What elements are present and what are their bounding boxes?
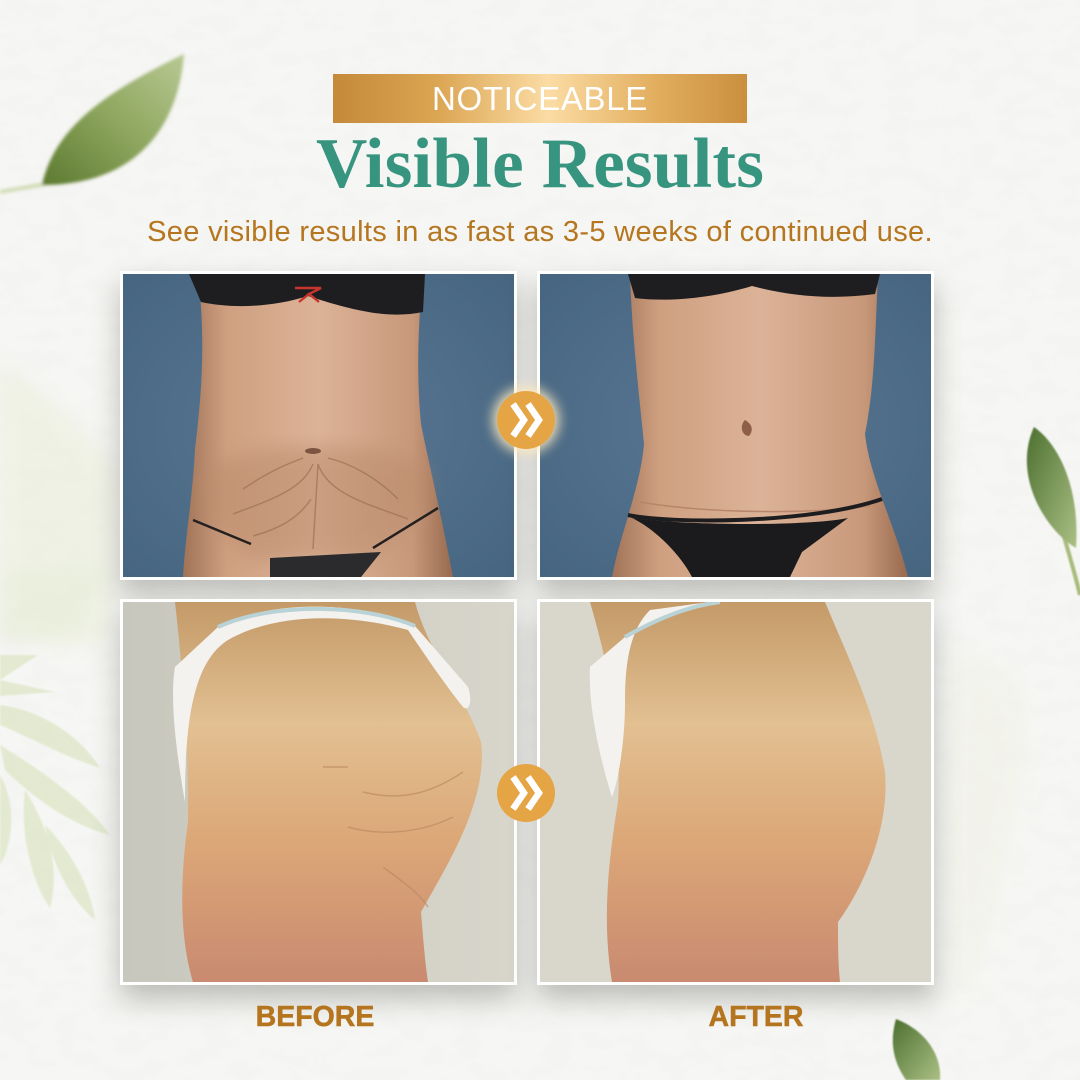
banner: noticeable: NOTICEABLE [432,80,648,117]
title: Visible Results [316,125,764,203]
icon: arrow badge, bottom row [497,764,555,822]
icon: leaf top left [0,54,184,192]
label: after: AFTER [708,1001,804,1033]
panel: before, front view [120,271,517,580]
panel: before, side view [120,599,517,985]
panel: after, front view [537,271,934,580]
icon: leaf right [1027,427,1080,595]
icon: arrow badge, top row [497,391,555,449]
subtitle: See visible results in as fast as 3-5 weeks of continued use. [147,216,933,248]
banner: noticeable [333,74,747,123]
icon: leaf bottom [893,1019,940,1080]
label: before: BEFORE [256,1001,374,1033]
panel: after, side view [537,599,934,985]
